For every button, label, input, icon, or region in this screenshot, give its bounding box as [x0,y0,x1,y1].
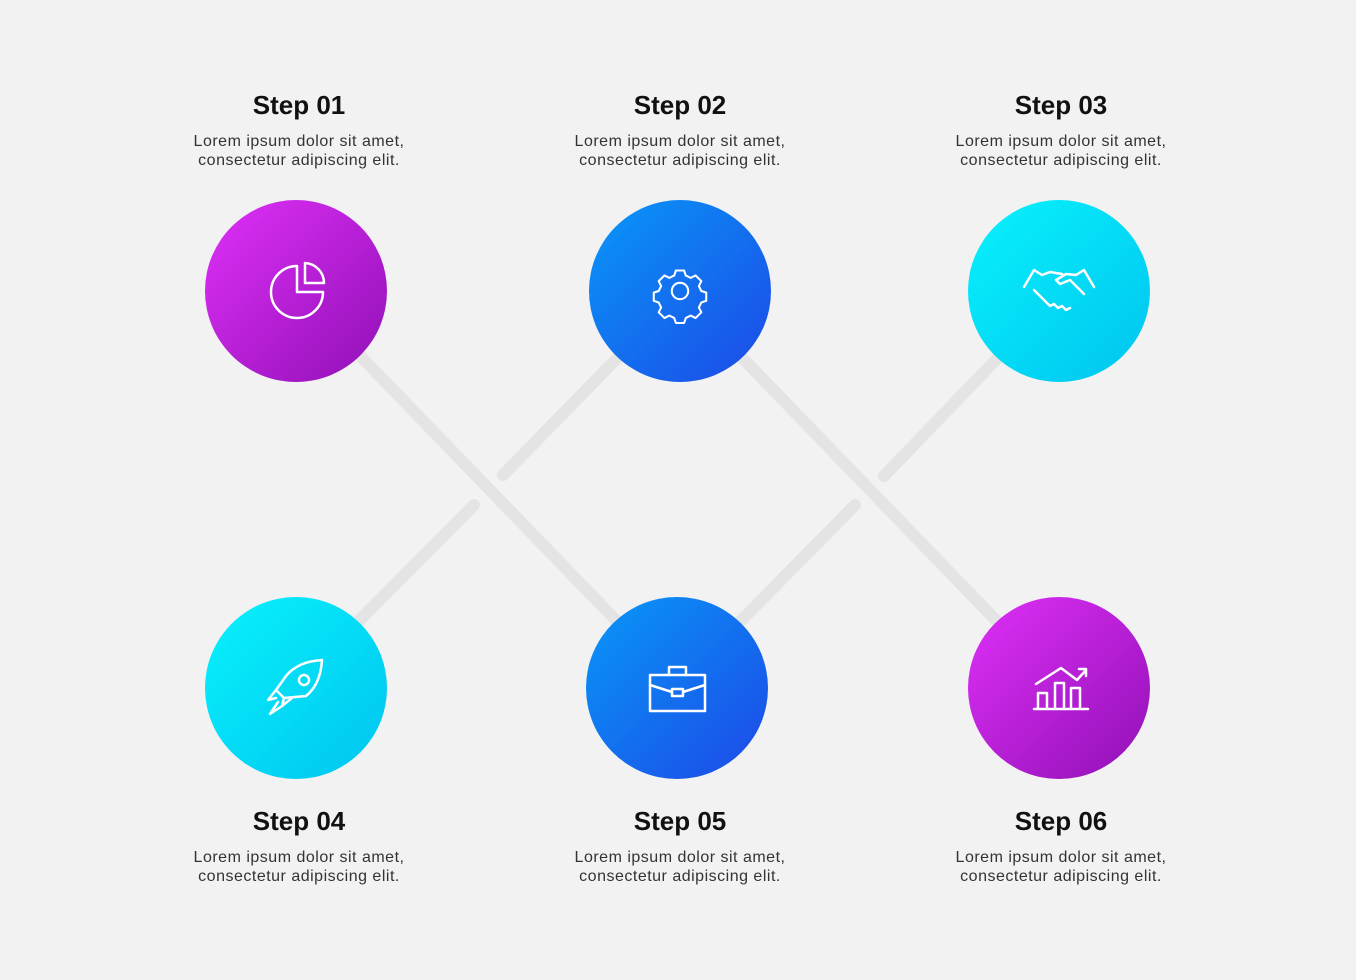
step 02 [575,90,785,382]
step 01: Lorem ipsum dolor sit amet, [194,133,404,150]
step 01 [194,90,404,382]
step 06 [956,597,1166,885]
icon: rocket [268,660,322,714]
step 03: Step 03 [1015,90,1107,120]
icon: gear [654,270,706,323]
step 01: Step 01 [253,90,345,120]
connector lines [340,335,1015,640]
step 04: Lorem ipsum dolor sit amet, [194,849,404,866]
step 02: Lorem ipsum dolor sit amet, [575,133,785,150]
icon: pie chart [271,263,324,318]
step 06: consectetur adipiscing elit. [960,868,1162,885]
step 05: Step 05 [634,806,726,836]
step 03 [956,90,1166,382]
step 06: Lorem ipsum dolor sit amet, [956,849,1166,866]
icon: handshake [1024,270,1094,310]
step 02: Step 02 [634,90,726,120]
step 05 [575,597,785,885]
step 04 [194,597,404,885]
step 05: consectetur adipiscing elit. [579,868,781,885]
step 01: consectetur adipiscing elit. [198,152,400,169]
step 03: Lorem ipsum dolor sit amet, [956,133,1166,150]
icon: bar chart growth [1034,668,1088,709]
step 03: consectetur adipiscing elit. [960,152,1162,169]
icon: briefcase [650,667,705,711]
step 04: consectetur adipiscing elit. [198,868,400,885]
step 05: Lorem ipsum dolor sit amet, [575,849,785,866]
step 04: Step 04 [253,806,346,836]
step 06: Step 06 [1015,806,1107,836]
step 02: consectetur adipiscing elit. [579,152,781,169]
